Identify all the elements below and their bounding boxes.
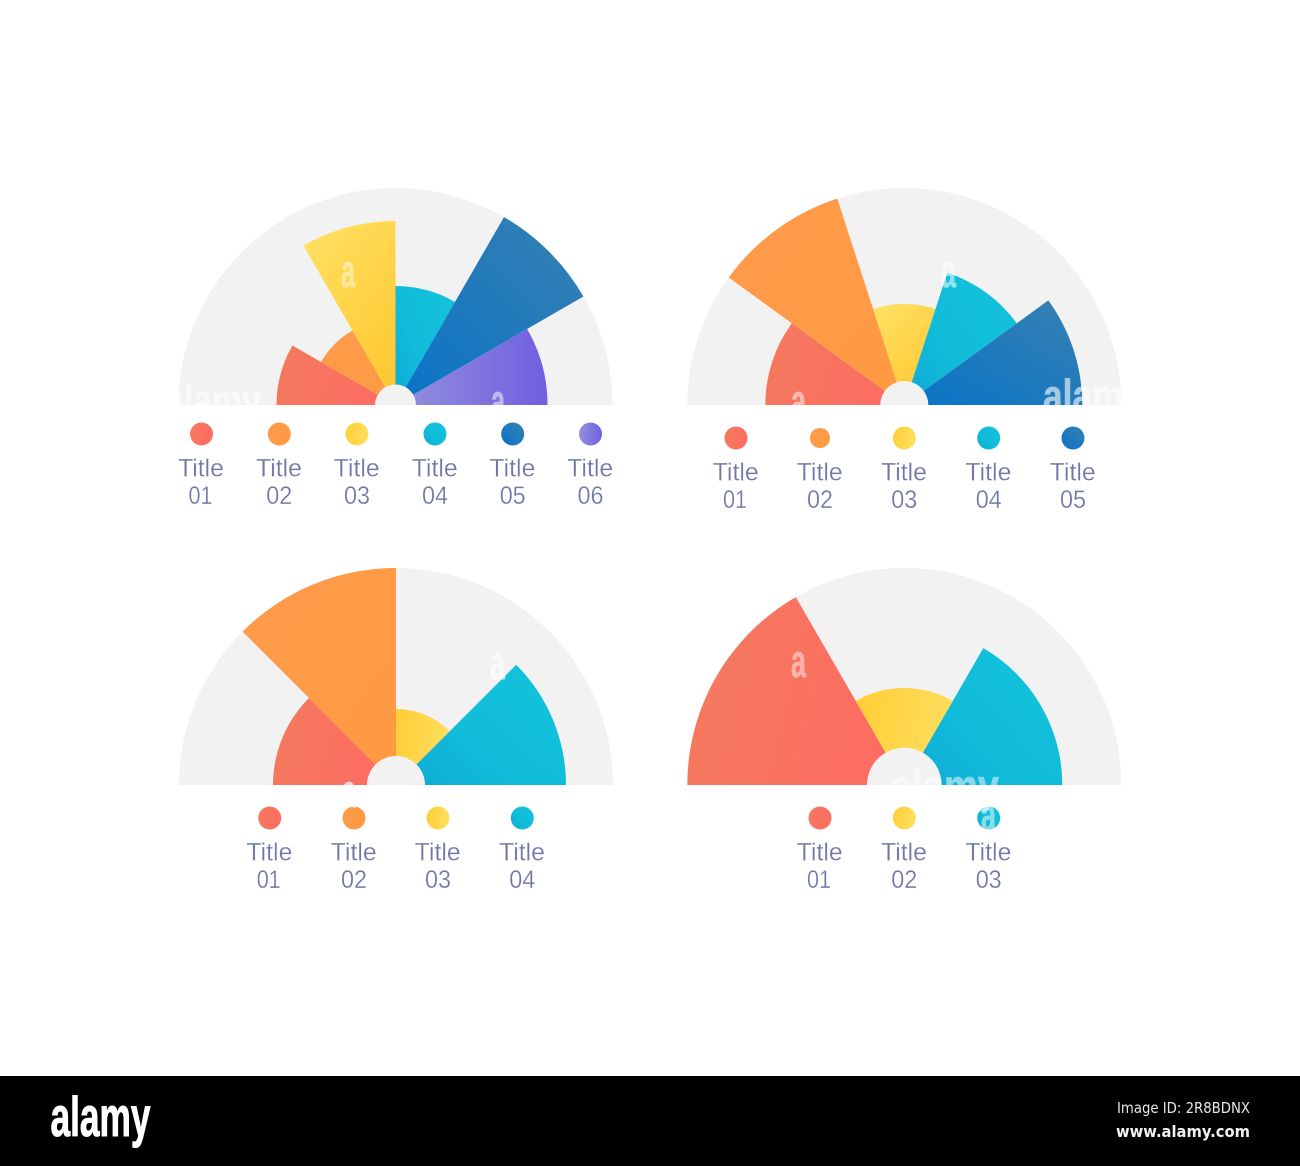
legend item: Title 02: 02: [891, 866, 917, 894]
chart 4 legend: [797, 806, 1011, 894]
chart 1 legend: [178, 422, 613, 510]
legend item: Title 05: Title: [489, 454, 535, 482]
faint watermark fragments: a: [791, 635, 806, 687]
legend item: Title 01: 01: [257, 866, 281, 894]
chart 2 sector 05: [904, 300, 1082, 405]
legend item: Title 04: [499, 806, 545, 894]
legend item: Title 02: 02: [807, 486, 833, 514]
legend item: Title 04: Title: [965, 458, 1011, 486]
chart 3 background semicircle: [179, 568, 613, 785]
faint watermark fragments: a: [490, 637, 505, 689]
legend item: Title 01: Title: [713, 458, 759, 486]
legend item: Title 04: 04: [509, 866, 535, 894]
legend item: Title 06: Title: [567, 454, 613, 482]
chart 4 sector 02: [856, 688, 953, 785]
chart 1 sector 02: [321, 331, 396, 405]
legend item: Title 01: Title: [178, 454, 224, 482]
chart 2 centre hole: [880, 381, 928, 405]
legend item: Title 03: 03: [891, 486, 917, 514]
chart 2: five-sector semicircle: [687, 188, 1121, 405]
chart 3 centre hole: [367, 756, 425, 785]
chart 2 sector 02: [729, 199, 904, 405]
legend item: Title 03: Title: [965, 838, 1011, 866]
chart 2 background semicircle: [687, 188, 1121, 405]
legend item: Title 02: Title: [256, 454, 302, 482]
legend item: Title 05: [1050, 426, 1096, 514]
legend item: Title 01: Title: [797, 838, 843, 866]
legend item: Title 03: Title: [334, 454, 380, 482]
chart 3 sector 02: [243, 568, 396, 785]
footer image id: Image ID: 2R8BDNX: [1117, 1099, 1250, 1117]
legend item: Title 01: 01: [723, 486, 747, 514]
legend item: Title 02: [881, 806, 927, 894]
legend item: Title 02: Title: [881, 838, 927, 866]
footer url: www.alamy.com: [1116, 1122, 1250, 1141]
faint watermark fragments: a: [342, 765, 356, 817]
legend item: Title 02: [797, 428, 843, 514]
legend item: Title 03: [881, 426, 927, 514]
legend item: Title 01: [713, 426, 759, 514]
chart 1 sector 06: [396, 329, 548, 405]
chart 1 sector 03: [304, 221, 396, 405]
legend item: Title 04: 04: [976, 486, 1002, 514]
legend item: Title 02: Title: [331, 838, 377, 866]
legend item: Title 01: 01: [807, 866, 831, 894]
legend item: Title 04: [965, 426, 1011, 514]
chart 1 centre hole: [375, 384, 416, 405]
legend item: Title 01: 01: [188, 482, 212, 510]
chart 3 sector 01: [273, 698, 396, 785]
legend item: Title 05: 05: [500, 482, 526, 510]
legend item: Title 02: [331, 806, 377, 894]
legend item: Title 06: [567, 422, 613, 510]
legend item: Title 03: 03: [976, 866, 1002, 894]
footer logo: alamy: alamy: [50, 1085, 150, 1148]
legend item: Title 01: [797, 806, 843, 894]
legend item: Title 01: [246, 806, 292, 894]
chart 4: three-sector semicircle: [687, 568, 1121, 785]
legend item: Title 06: 06: [578, 482, 604, 510]
footer bar: [0, 1076, 1300, 1166]
legend item: Title 04: Title: [499, 838, 545, 866]
chart 3 sector 04: [396, 665, 566, 785]
legend item: Title 05: 05: [1060, 486, 1086, 514]
legend item: Title 02: 02: [341, 866, 367, 894]
faint watermark fragments: alamy: [1043, 370, 1143, 422]
legend item: Title 03: [334, 422, 380, 510]
faint watermark fragments: a: [341, 245, 355, 297]
faint watermark fragments: a: [941, 245, 956, 297]
chart 1 background semicircle: [178, 188, 612, 405]
legend item: Title 05: Title: [1050, 458, 1096, 486]
chart 2 legend: [713, 426, 1096, 514]
chart 2 sector 01: [765, 323, 904, 405]
legend item: Title 03: 03: [425, 866, 451, 894]
chart 2 sector 03: [873, 304, 936, 405]
chart 1 sector 04: [396, 286, 455, 405]
chart 2 sector 04: [904, 273, 1017, 405]
legend item: Title 05: [489, 422, 535, 510]
legend item: Title 02: 02: [266, 482, 292, 510]
faint watermark fragments: a: [491, 375, 505, 427]
chart 3 legend: [246, 806, 545, 894]
faint watermark fragments: alamy: [891, 760, 999, 812]
legend item: Title 03: [965, 806, 1011, 894]
faint watermark fragments: alamy: [165, 375, 261, 427]
chart 1 sector 05: [396, 217, 583, 405]
chart 4 sector 01: [687, 597, 904, 785]
chart 1 sector 01: [276, 346, 396, 405]
legend item: Title 04: 04: [422, 482, 448, 510]
legend item: Title 02: [256, 422, 302, 510]
chart 4 background semicircle: [687, 568, 1121, 785]
legend item: Title 03: [415, 806, 461, 894]
chart 4 centre hole: [867, 748, 942, 785]
legend item: Title 04: [412, 422, 458, 510]
faint watermark fragments: a: [981, 789, 996, 841]
chart 3 sector 03: [396, 709, 450, 785]
legend item: Title 01: [178, 422, 224, 510]
chart 4 sector 03: [904, 648, 1062, 785]
faint watermark fragments: [165, 245, 1143, 841]
legend item: Title 04: Title: [412, 454, 458, 482]
faint watermark fragments: a: [791, 375, 806, 427]
legend item: Title 02: Title: [797, 458, 843, 486]
chart 1: six-sector semicircle: [178, 188, 612, 405]
legend item: Title 03: Title: [881, 458, 927, 486]
legend item: Title 01: Title: [246, 838, 292, 866]
legend item: Title 03: Title: [415, 838, 461, 866]
chart 3: four-sector semicircle: [179, 568, 613, 785]
legend item: Title 03: 03: [344, 482, 370, 510]
